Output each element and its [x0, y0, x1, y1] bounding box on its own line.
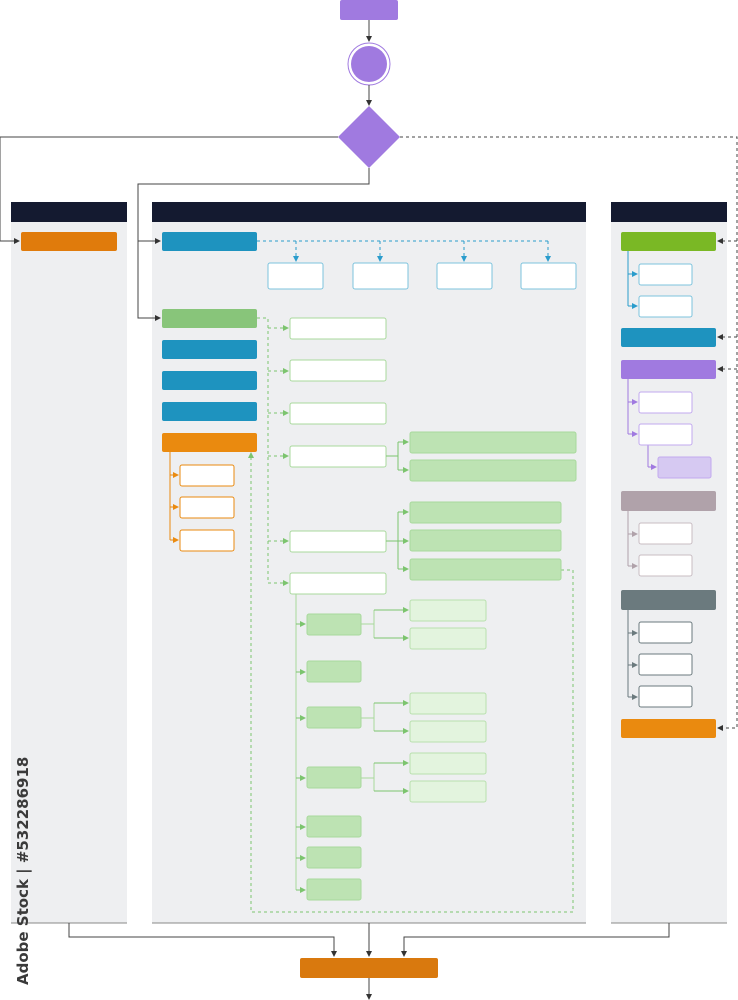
bottom end box	[300, 958, 438, 978]
panel: left column	[11, 202, 127, 923]
box: left orange	[21, 232, 117, 251]
circle node	[348, 43, 390, 85]
panel: middle column	[152, 202, 586, 923]
top start box	[340, 0, 398, 20]
decision diamond	[338, 106, 400, 168]
panel: right column	[611, 202, 727, 923]
watermark text: Adobe Stock | #532286918	[14, 757, 33, 985]
